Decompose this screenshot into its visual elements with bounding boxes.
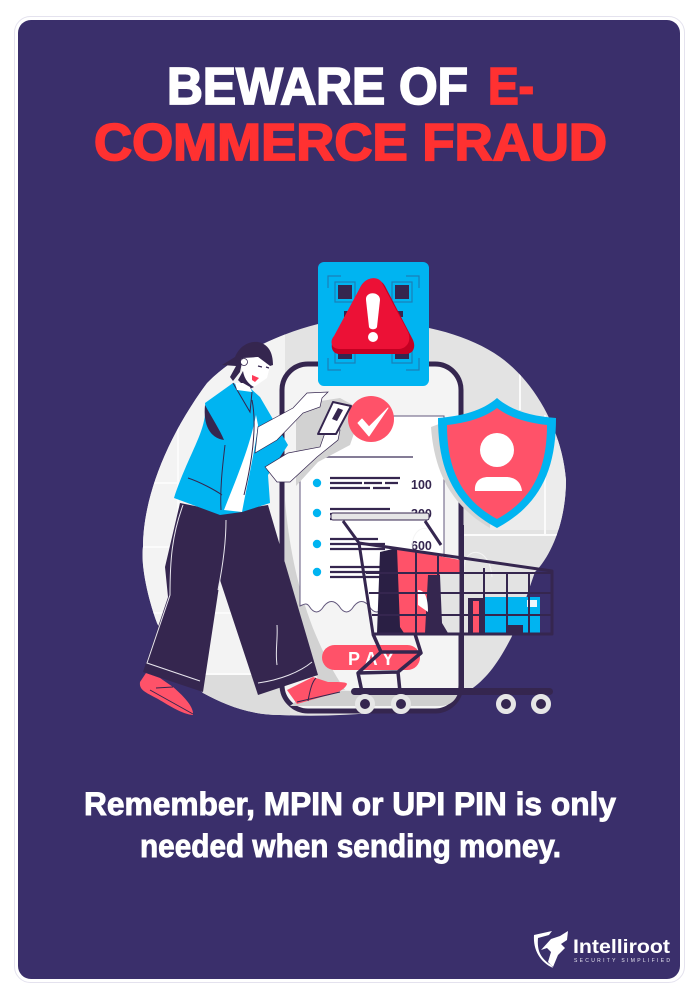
shirt	[174, 383, 288, 515]
logo: Intelliroot	[534, 931, 671, 968]
receipt	[296, 398, 444, 612]
background blob	[142, 324, 566, 716]
title: COMMERCE FRAUD	[94, 114, 607, 172]
arms	[255, 392, 328, 453]
icon: warning triangle	[332, 278, 414, 354]
pay button	[322, 645, 420, 670]
receipt: 600	[411, 539, 432, 553]
illustration: online shopping fraud scene	[130, 262, 580, 730]
logo: Intelliroot: SECURITY SIMPLIFIED	[574, 958, 670, 964]
credit card	[318, 402, 351, 434]
trousers	[143, 503, 318, 695]
shopper	[140, 342, 351, 715]
reminder text: needed when sending money.	[140, 828, 561, 864]
receipt: 100	[411, 478, 432, 492]
shield	[431, 398, 556, 528]
shoes	[140, 673, 193, 715]
pay button: PAY	[348, 649, 394, 669]
logo: Intelliroot: Intelliroot	[573, 937, 671, 958]
title	[94, 58, 607, 172]
title: BEWARE OF	[167, 58, 468, 116]
wheels	[358, 696, 548, 712]
reminder text	[84, 786, 616, 864]
head	[222, 342, 273, 381]
QR warning tile	[318, 262, 429, 386]
reminder text: Remember, MPIN or UPI PIN is only	[84, 786, 616, 822]
receipt: 300	[411, 507, 432, 521]
phone	[282, 364, 461, 711]
shopping cart	[331, 513, 553, 712]
check badge	[348, 396, 394, 442]
shopping bags	[377, 528, 540, 633]
icon: eagle shield	[534, 931, 568, 968]
title: E-	[488, 58, 534, 116]
